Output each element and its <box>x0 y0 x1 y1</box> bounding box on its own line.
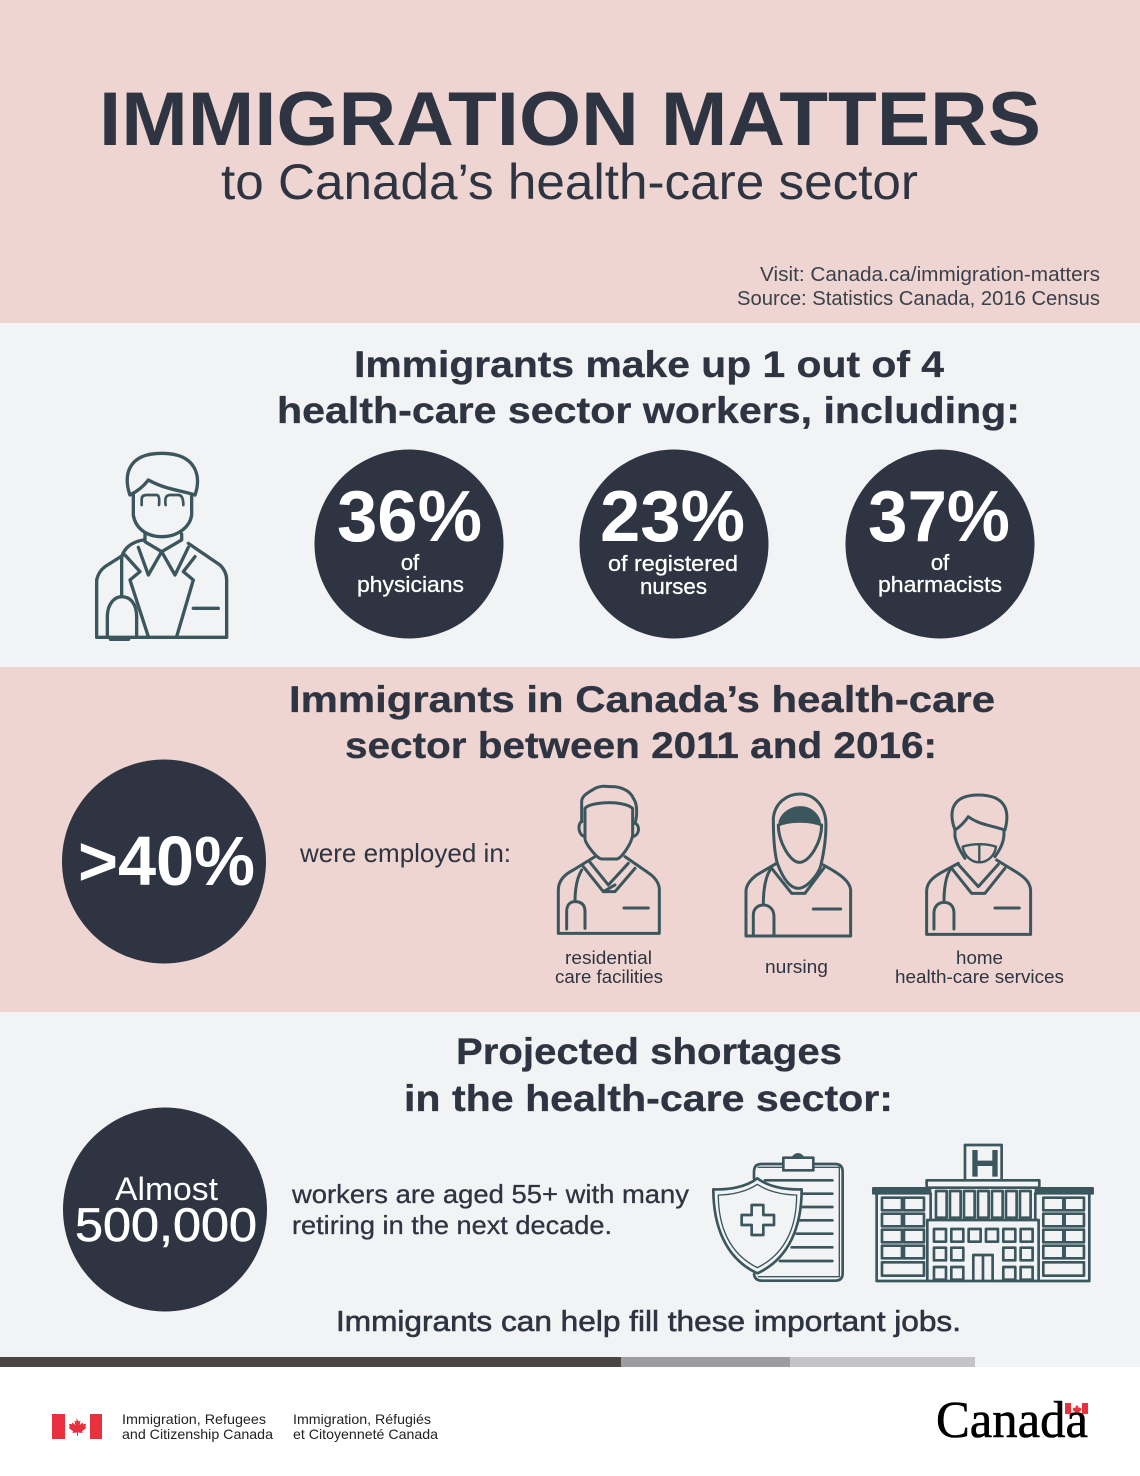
text: department name English: and Citizenship Canada <box>122 1426 273 1442</box>
label: residential care facilities: care facilities <box>555 967 663 987</box>
label: residential care facilities <box>555 948 663 987</box>
stat: physicians <box>314 450 504 638</box>
icon: hospital <box>873 1145 1093 1281</box>
text: department name French: Immigration, Réfugiés <box>293 1411 431 1427</box>
panel: share of workers: health-care sector workers, including: <box>277 390 1020 431</box>
stat: registered nurses <box>580 450 768 638</box>
text: workers aged 55+: workers are aged 55+ with many <box>291 1179 689 1209</box>
panel: share of workers <box>0 323 1140 667</box>
icon: doctor <box>97 453 227 639</box>
stat: physicians: of <box>401 550 420 575</box>
label: nursing: nursing <box>765 957 828 977</box>
stat: over 40 percent <box>62 760 266 964</box>
icon: nurse in hijab <box>746 794 851 936</box>
stat: pharmacists <box>846 450 1034 638</box>
stat: physicians: 36% <box>337 477 482 557</box>
heading: one out of four: Immigrants make up 1 out of 4 <box>354 344 944 385</box>
text: workers aged 55+ <box>291 1179 689 1240</box>
label: residential care facilities: residential <box>565 948 652 968</box>
text: department name French: et Citoyenneté Canada <box>293 1426 438 1442</box>
callout: fill these jobs: Immigrants can help fill these important jobs. <box>336 1306 961 1338</box>
icon: clipboard and shield <box>713 1154 843 1281</box>
stat: registered nurses: of registered <box>608 551 738 576</box>
stat: pharmacists: pharmacists <box>878 572 1002 597</box>
colour bar <box>0 1357 975 1367</box>
text: workers aged 55+: retiring in the next decade. <box>292 1210 612 1240</box>
icon: Canadian flag <box>52 1414 102 1439</box>
text: department name English: Immigration, Refugees <box>122 1411 266 1427</box>
label: home health-care services: home <box>956 948 1003 968</box>
footer: government signature <box>52 1392 1088 1449</box>
text: department name French <box>293 1411 438 1442</box>
panel: projected shortages <box>0 1012 1140 1367</box>
stat: registered nurses: 23% <box>600 477 745 557</box>
source note: Source: Statistics Canada, 2016 Census <box>737 288 1100 310</box>
subtitle: to Canada’s health-care sector <box>221 154 918 210</box>
heading: projected shortages: Projected shortages <box>456 1031 842 1072</box>
heading: 2011 to 2016: Immigrants in Canada’s health-care <box>289 679 995 720</box>
icon: nurse with mask <box>927 795 1031 934</box>
label: home health-care services: health-care services <box>895 967 1064 987</box>
text: were employed in: were employed in: <box>299 838 511 868</box>
stat: almost 500,000 <box>63 1108 267 1312</box>
stat: registered nurses: nurses <box>640 574 707 599</box>
label: home health-care services <box>895 948 1064 987</box>
stat: pharmacists: of <box>931 550 950 575</box>
stat: pharmacists: 37% <box>868 477 1010 557</box>
panel: header <box>0 0 1140 323</box>
stat: almost 500,000: Almost <box>115 1171 218 1207</box>
visit link: Visit: Canada.ca/immigration-matters <box>760 264 1100 286</box>
title: IMMIGRATION MATTERS <box>99 77 1041 162</box>
icon: care worker <box>558 786 659 933</box>
Canada wordmark: Canada <box>936 1392 1088 1449</box>
panel: employment 2011 to 2016 <box>0 667 1140 1012</box>
panel: employment 2011 to 2016: sector between 2011 and 2016: <box>345 725 937 766</box>
stat: almost 500,000: 500,000 <box>75 1198 257 1251</box>
text: department name English <box>122 1411 273 1442</box>
panel: projected shortages: in the health-care sector: <box>404 1078 893 1119</box>
stat: physicians: physicians <box>357 572 464 597</box>
stat: over 40 percent: >40% <box>78 822 255 900</box>
